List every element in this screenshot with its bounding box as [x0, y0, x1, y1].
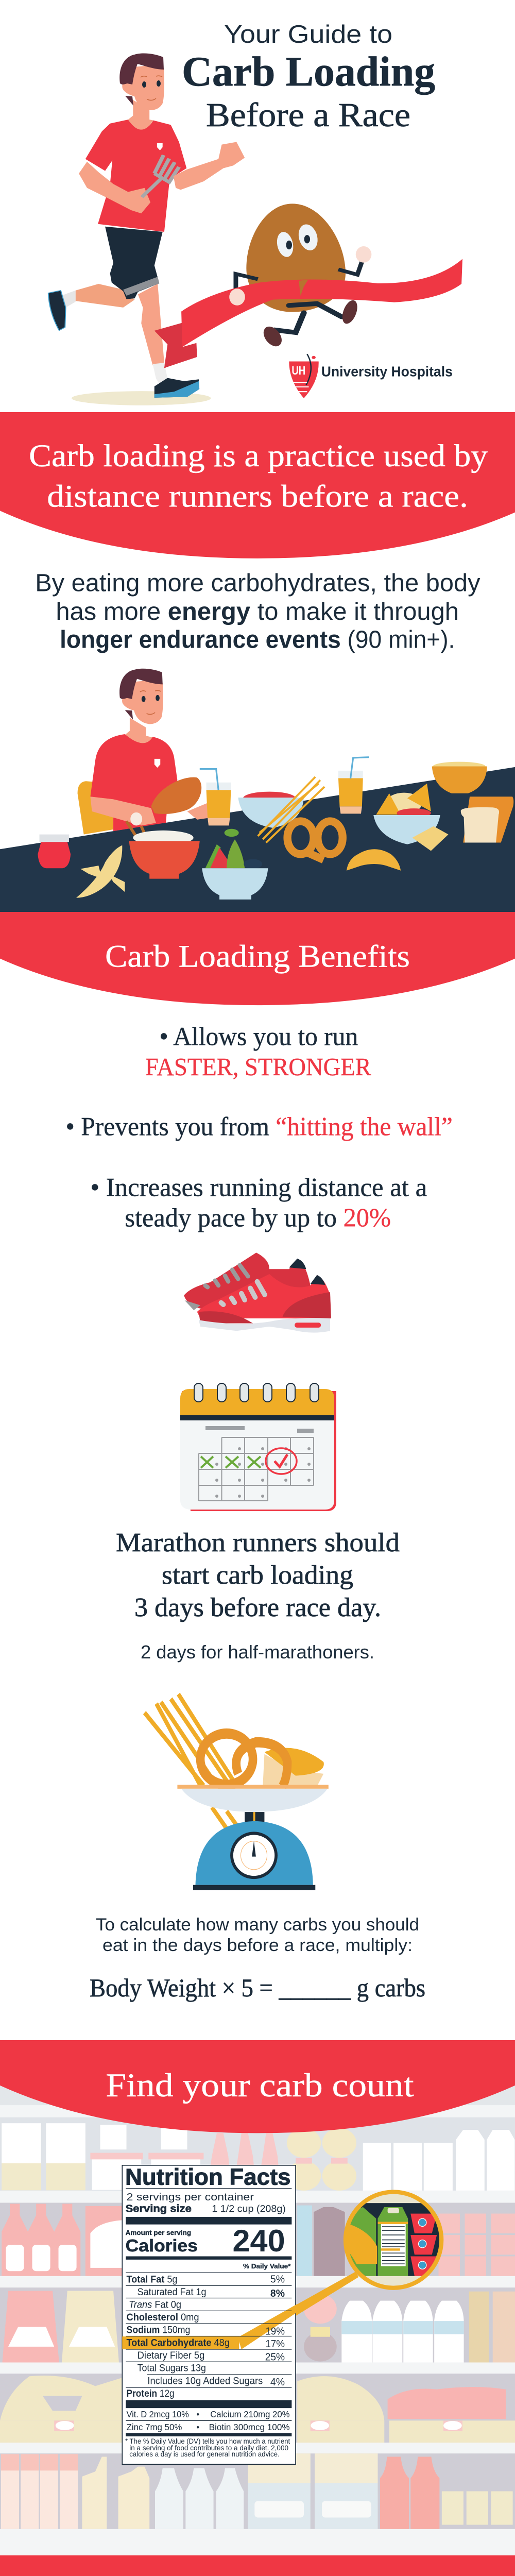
nutrition facts label: Protein 12g: [127, 2388, 175, 2399]
connector line to magnifier: [238, 2272, 358, 2349]
red band above benefits banner: [0, 912, 515, 933]
benefit 3 line 1: • Increases running distance at a: [90, 1174, 427, 1202]
illustration: runner with fork: [48, 100, 245, 405]
nutrition facts label: calories a day is used for general nutrition advice.: [129, 2450, 280, 2458]
nutrition facts label: Total Carbohydrate 48g: [127, 2338, 230, 2349]
nutrition facts label: Saturated Fat 1g: [138, 2287, 207, 2298]
illustration: potato breaking the finish ribbon: [154, 204, 462, 368]
half marathon note: 2 days for half-marathoners.: [141, 1641, 374, 1663]
find your carb count banner: [0, 2061, 515, 2133]
nutrition facts label: in a serving of food contributes to a daily diet. 2,000: [129, 2444, 288, 2452]
panel: find your carb count: [0, 2040, 515, 2555]
heading: Carb Loading Benefits: [105, 939, 410, 974]
benefit 2: • Prevents you from “hitting the wall”: [66, 1113, 453, 1142]
nutrition facts label: Dietary Fiber 5g: [138, 2350, 204, 2361]
benefit 1: • Allows you to run: [159, 1022, 358, 1051]
nutrition facts label: Nutrition Facts: [125, 2164, 290, 2190]
marathon text line 2: start carb loading: [162, 1561, 353, 1590]
illustration: runner head: [119, 54, 164, 110]
nutrition facts label: Calcium 210mg 20%: [210, 2409, 290, 2419]
nutrition facts label: % Daily Value*: [243, 2262, 290, 2270]
nutrition facts label: Amount per serving: [126, 2229, 191, 2236]
benefit 1 emphasis: FASTER, STRONGER: [145, 1054, 371, 1081]
nutrition facts label: 5%: [270, 2274, 285, 2285]
body text line 1: By eating more carbohydrates, the body: [35, 569, 480, 597]
intro line 2: distance runners before a race.: [47, 479, 468, 514]
benefits banner: [0, 927, 515, 1005]
illustration: food on kitchen scale: [145, 1694, 329, 1890]
panel: eat carbs evenly: [0, 2555, 515, 2576]
marathon text line 1: Marathon runners should: [116, 1528, 400, 1557]
icon: red running shoes: [184, 1252, 331, 1333]
nutrition facts label: •: [196, 2410, 199, 2419]
nutrition facts label: Includes 10g Added Sugars: [147, 2376, 263, 2387]
illustration: man eating at table: [0, 669, 515, 912]
logo: University Hospitals: [289, 354, 453, 398]
nutrition facts label: 17%: [265, 2338, 285, 2350]
title line: Before a Race: Before a Race: [206, 96, 410, 134]
logo: University Hospitals: UH: [291, 364, 305, 377]
nutrition facts label: 240: [233, 2223, 285, 2258]
nutrition facts label: 1 1/2 cup (208g): [212, 2204, 286, 2214]
red intro banner: [0, 412, 515, 558]
nutrition facts label: •: [196, 2422, 199, 2432]
title line: Carb Loading: Carb Loading: [182, 48, 435, 95]
nutrition facts label: 2 servings per container: [127, 2192, 254, 2203]
nutrition facts label: Total Sugars 13g: [138, 2363, 206, 2374]
nutrition facts label: Trans Fat 0g: [129, 2300, 181, 2311]
magnifier lens showing carton: [341, 2191, 447, 2293]
formula: Body Weight × 5 = ______ g carbs: [90, 1973, 425, 2002]
calculation instructions line 1: To calculate how many carbs you should: [96, 1915, 419, 1935]
table: [0, 767, 515, 912]
nutrition facts label: Sodium 150mg: [127, 2325, 190, 2336]
nutrition facts label: Biotin 300mcg 100%: [209, 2422, 290, 2432]
nutrition facts label: Vit. D 2mcg 10%: [127, 2409, 189, 2419]
intro line 1: Carb loading is a practice used by: [29, 438, 488, 473]
heading: Find your carb count: [106, 2067, 414, 2104]
nutrition facts label: 8%: [270, 2288, 285, 2299]
nutrition facts label: 25%: [265, 2352, 285, 2363]
nutrition facts label: * The % Daily Value (DV) tells you how much a nutrient: [125, 2437, 290, 2445]
nutrition facts label: Serving size: [126, 2203, 192, 2214]
nutrition facts label: Zinc 7mg 50%: [127, 2422, 182, 2432]
icon: calendar: [180, 1383, 336, 1511]
nutrition facts label: Total Fat 5g: [127, 2275, 177, 2285]
nutrition facts label: 4%: [270, 2377, 285, 2388]
logo: University Hospitals: University Hospitals: [321, 364, 453, 380]
title line: Your Guide to: Your Guide to: [224, 21, 392, 48]
red band above supermarket: [0, 2040, 515, 2066]
background: supermarket shelves: [0, 2080, 515, 2555]
nutrition facts label: Cholesterol 0mg: [127, 2312, 199, 2323]
nutrition facts label: 19%: [265, 2326, 285, 2337]
benefit 3 line 2: steady pace by up to 20%: [125, 1204, 391, 1232]
nutrition facts label: [122, 2164, 297, 2464]
panel: hero: [48, 21, 462, 405]
panel: what is carb loading: [0, 412, 515, 912]
body text line 2: has more energy to make it through: [56, 598, 459, 625]
body text line 3: longer endurance events (90 min+).: [60, 625, 455, 653]
calculation instructions line 2: eat in the days before a race, multiply:: [102, 1936, 413, 1955]
nutrition facts label: Calories: [126, 2236, 198, 2256]
marathon text line 3: 3 days before race day.: [134, 1593, 381, 1622]
red band above clock banner: [0, 2555, 515, 2576]
panel: carb loading benefits: [0, 912, 515, 2002]
